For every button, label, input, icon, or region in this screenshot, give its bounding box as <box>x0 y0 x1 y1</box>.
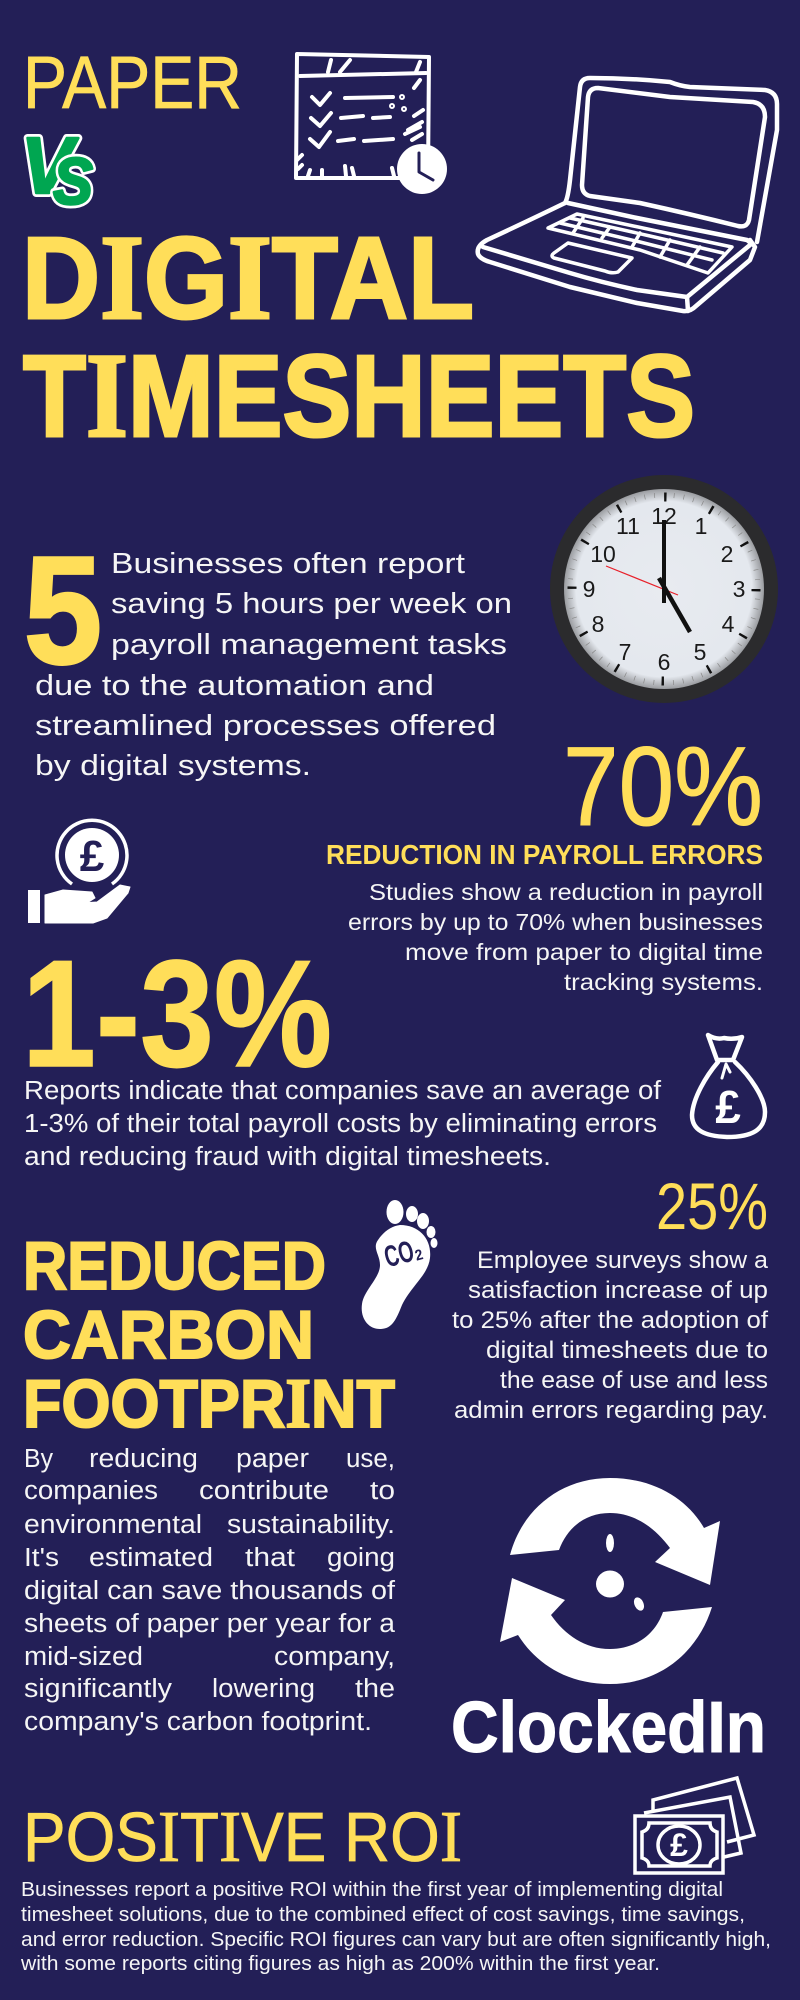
text: carbon footprint body: to <box>370 1477 395 1505</box>
text: carbon footprint body: lowering <box>212 1675 315 1703</box>
text: carbon footprint body: going <box>327 1544 395 1572</box>
text: payroll cost savings <box>24 1077 662 1171</box>
text: employee satisfaction: admin errors regarding pay. <box>454 1397 768 1424</box>
icon: wall clock: 7 <box>619 639 631 665</box>
heading: reduction in payroll errors: REDUCTION IN PAYROLL ERRORS <box>326 839 763 870</box>
icon: wall clock: 1 <box>695 513 707 539</box>
icon: wall clock <box>550 475 778 703</box>
text: carbon footprint body: sheets of paper per year for a <box>24 1610 396 1638</box>
text: employee satisfaction <box>452 1247 768 1424</box>
icon: VS badge: S <box>53 144 93 218</box>
text: 5 hours saved: Businesses often report <box>111 548 465 580</box>
icon: wall clock: 9 <box>583 576 595 602</box>
text: carbon footprint body: company's carbon footprint. <box>24 1708 372 1736</box>
icon: wall clock: 3 <box>733 576 745 602</box>
text: ROI body: with some reports citing figures as high as 200% within the first year. <box>20 1952 660 1975</box>
text: carbon footprint body: environmental <box>24 1511 202 1539</box>
text: carbon footprint body: estimated <box>89 1544 213 1572</box>
text: carbon footprint body: that <box>245 1544 295 1572</box>
icon: wall clock: 5 <box>694 639 706 665</box>
title: PAPER: PAPER <box>23 41 242 124</box>
text: 70% explanation: Studies show a reduction in payroll <box>369 879 763 905</box>
text: carbon footprint body: By <box>24 1445 53 1473</box>
text: carbon footprint body: digital can save thousands of <box>24 1577 396 1605</box>
text: carbon footprint body: companies <box>24 1477 158 1505</box>
title: DIGITAL: DIGITAL <box>22 211 474 345</box>
text: ROI body: timesheet solutions, due to the combined effect of cost savings, time savings, <box>21 1903 745 1926</box>
text: 5 hours saved: by digital systems. <box>35 750 311 782</box>
icon: CO2 footprint: CO₂ <box>381 1233 426 1274</box>
text: 5 hours saved: saving 5 hours per week on <box>111 588 512 620</box>
text: employee satisfaction: the ease of use and less <box>500 1367 768 1394</box>
big number: 1-3%: 1-3% <box>22 929 332 1099</box>
icon: hand holding pound coin: £ <box>80 832 105 881</box>
logo: ClockedIn arrows <box>500 1478 720 1684</box>
icon: money bag: £ <box>715 1081 741 1133</box>
text: employee satisfaction: digital timesheets due to <box>486 1337 768 1364</box>
icon: money bag <box>692 1035 765 1137</box>
icon: wall clock: 10 <box>590 541 616 567</box>
heading: reduced carbon footprint: CARBON <box>23 1297 314 1373</box>
text: ROI body <box>20 1878 771 1975</box>
icon: CO2 footprint <box>362 1200 438 1329</box>
icon: checklist with clock <box>296 54 447 194</box>
text: carbon footprint body: paper <box>236 1445 310 1473</box>
text: employee satisfaction: Employee surveys show a <box>477 1247 768 1274</box>
icon: wall clock: 8 <box>592 611 604 637</box>
icon: wall clock: 2 <box>721 541 733 567</box>
icon: wall clock: 11 <box>616 513 640 539</box>
icon: wall clock: 4 <box>722 611 735 637</box>
icon: laptop <box>478 78 777 311</box>
logo: ClockedIn wordmark: ClockedIn <box>451 1688 766 1768</box>
big number: 25%: 25% <box>656 1169 768 1243</box>
text: employee satisfaction: satisfaction increase of up <box>468 1277 768 1304</box>
icon: VS badge <box>21 121 93 218</box>
text: payroll cost savings: Reports indicate that companies save an average of <box>24 1077 662 1105</box>
text: payroll cost savings: and reducing fraud with digital timesheets. <box>24 1143 551 1171</box>
text: carbon footprint body: reducing <box>89 1445 198 1473</box>
text: 70% explanation <box>348 879 763 995</box>
text: payroll cost savings: 1-3% of their total payroll costs by eliminating errors <box>24 1110 657 1138</box>
icon: VS badge: V <box>21 121 78 210</box>
heading: reduced carbon footprint <box>23 1228 395 1443</box>
icon: wall clock: 12 <box>651 503 677 529</box>
text: carbon footprint body: contribute <box>199 1477 329 1505</box>
icon: VS badge: V <box>21 121 78 210</box>
text: carbon footprint body: sustainability. <box>227 1511 395 1539</box>
heading: positive ROI: POSITIVE ROI <box>23 1796 462 1877</box>
text: 70% explanation: errors by up to 70% when businesses <box>348 909 763 935</box>
heading: reduced carbon footprint: FOOTPRINT <box>23 1365 395 1443</box>
icon: pound banknotes: £ <box>670 1827 688 1863</box>
text: carbon footprint body: It's <box>24 1544 59 1572</box>
text: carbon footprint body: mid-sized <box>24 1643 143 1671</box>
text: 70% explanation: move from paper to digital time <box>405 939 763 965</box>
text: 5 hours saved: due to the automation and <box>35 670 434 702</box>
text: 5 hours saved <box>35 548 512 782</box>
text: carbon footprint body: use, <box>346 1445 395 1473</box>
text: carbon footprint body <box>24 1445 396 1736</box>
icon: wall clock: 6 <box>658 649 670 675</box>
text: 5 hours saved: payroll management tasks <box>111 629 507 661</box>
text: 5 hours saved: streamlined processes offered <box>35 710 496 742</box>
text: carbon footprint body: the <box>355 1675 395 1703</box>
big number: 5: 5 <box>24 525 102 696</box>
title: TIMESHEETS: TIMESHEETS <box>23 329 695 463</box>
heading: reduced carbon footprint: REDUCED <box>23 1228 326 1304</box>
text: employee satisfaction: to 25% after the adoption of <box>452 1307 768 1334</box>
big number: 70%: 70% <box>563 724 763 849</box>
text: 70% explanation: tracking systems. <box>564 969 763 995</box>
text: carbon footprint body: significantly <box>24 1675 172 1703</box>
icon: hand holding pound coin <box>28 820 130 923</box>
icon: VS badge: S <box>53 144 93 218</box>
text: ROI body: Businesses report a positive ROI within the first year of implementing digital <box>21 1878 723 1901</box>
icon: pound banknotes <box>635 1778 754 1873</box>
text: ROI body: and error reduction. Specific ROI figures can vary but are often significantly high, <box>21 1928 771 1951</box>
text: carbon footprint body: company, <box>274 1643 395 1671</box>
